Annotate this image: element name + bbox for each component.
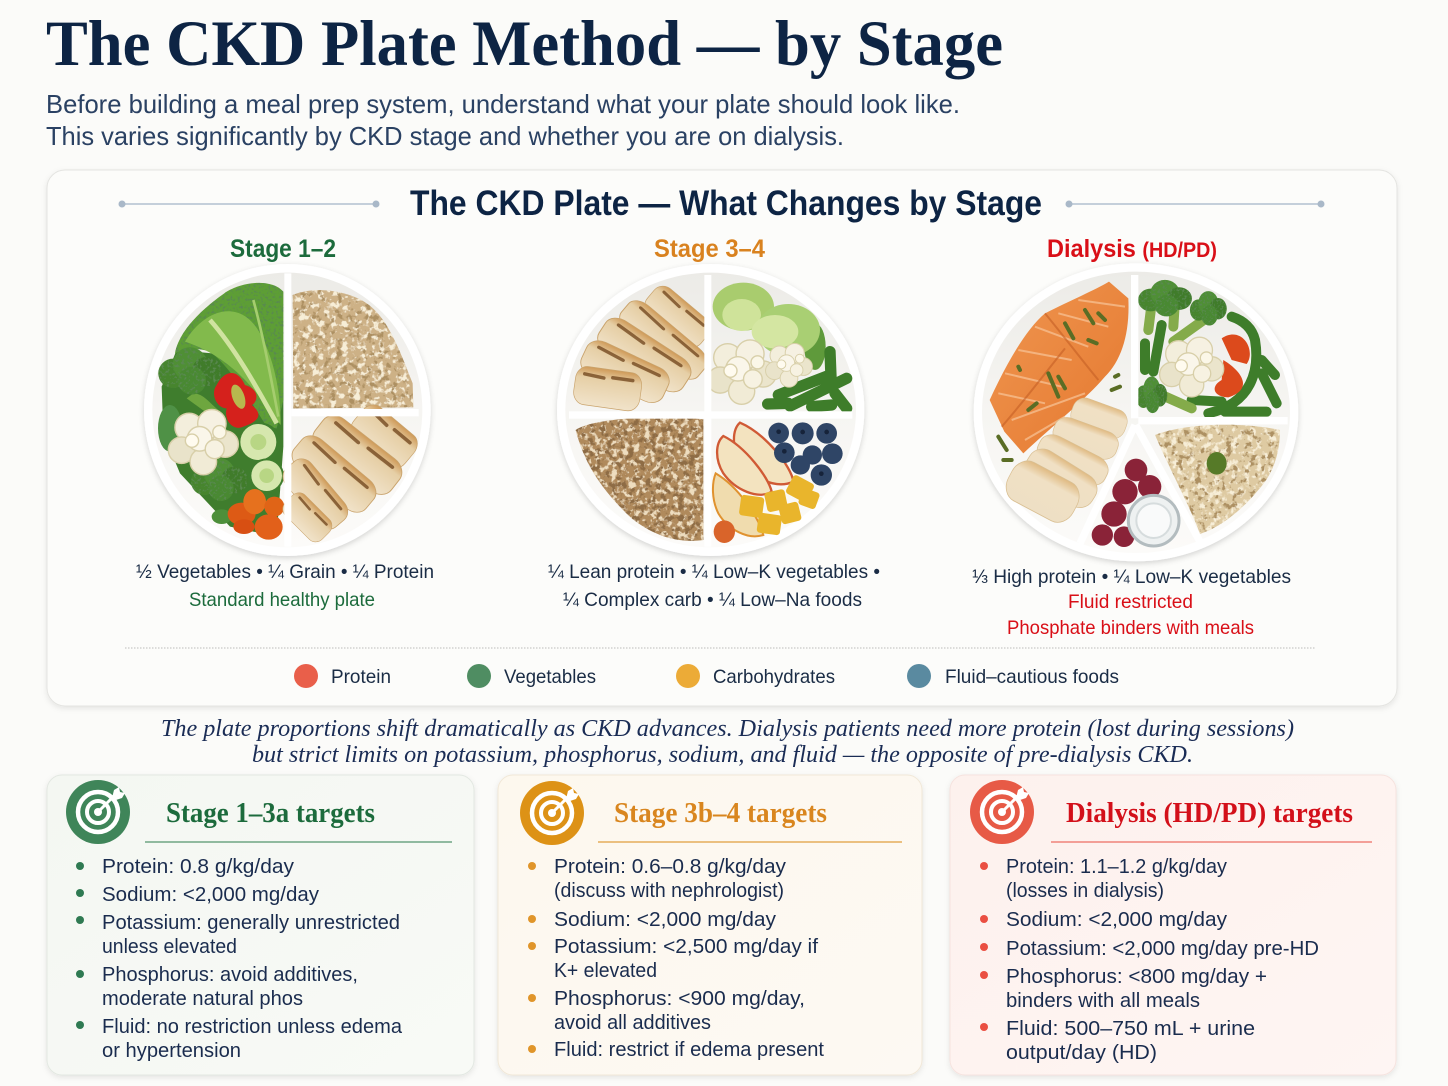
legend: protein: [294, 664, 391, 688]
caption: dialysis: Phosphate binders with meals: [1007, 617, 1254, 639]
target list: output/day (HD): [1006, 1041, 1157, 1064]
caption: dialysis: Fluid restricted: [1068, 591, 1193, 613]
panel heading: The CKD Plate — What Changes by Stage: [410, 184, 1042, 223]
target list: Protein: 0.8 g/kg/day: [102, 855, 295, 878]
grapes and glass: [1092, 459, 1179, 547]
blueberries: [768, 422, 843, 486]
target list: [980, 855, 1319, 1064]
caption: stage 3-4: ¼ Lean protein • ¼ Low–K vegetables •: [548, 561, 880, 583]
heading: Stage 3b–4 targets: [614, 797, 827, 829]
icon: target red: [970, 780, 1034, 844]
target list: Fluid: 500–750 mL + urine: [1006, 1017, 1255, 1040]
caption: stage 1-2: ½ Vegetables • ¼ Grain • ¼ Protein: [136, 561, 434, 583]
target list: Protein: 0.6–0.8 g/kg/day: [554, 855, 787, 878]
target list: Potassium: <2,000 mg/day pre-HD: [1006, 937, 1319, 960]
target list: Fluid: restrict if edema present: [554, 1038, 824, 1061]
subtitle: This varies significantly by CKD stage and whether you are on dialysis.: [46, 121, 844, 151]
vegetables: [1136, 280, 1277, 413]
target list: Fluid: no restriction unless edema: [102, 1015, 403, 1038]
subtitle: [46, 89, 960, 151]
legend: vegetables: Vegetables: [504, 666, 596, 688]
legend: carbohydrates: Carbohydrates: [713, 666, 835, 688]
apples: [713, 423, 793, 543]
target list: Phosphorus: avoid additives,: [102, 963, 358, 986]
target list: Sodium: <2,000 mg/day: [554, 908, 777, 931]
grain: [576, 417, 703, 541]
panel: dialysis targets: [950, 775, 1396, 1075]
italic note: [161, 716, 1294, 768]
target list: Potassium: generally unrestricted: [102, 911, 400, 934]
caption: stage 1-2: Standard healthy plate: [189, 589, 375, 611]
italic note: but strict limits on potassium, phosphorus, sodium, and fluid — the opposite of pre-dialysis CKD.: [252, 742, 1193, 768]
protein: [572, 281, 715, 412]
vegetables: [158, 283, 284, 540]
target list: (losses in dialysis): [1006, 879, 1164, 902]
target list: Sodium: <2,000 mg/day: [1006, 908, 1228, 931]
target list: (discuss with nephrologist): [554, 879, 784, 902]
subtitle: Before building a meal prep system, understand what your plate should look like.: [46, 89, 960, 119]
caption: stage 1-2: [136, 561, 434, 611]
dividers: [704, 275, 711, 547]
heading: Dialysis (HD/PD) targets: [1066, 797, 1353, 829]
target list: Protein: 1.1–1.2 g/kg/day: [1006, 855, 1228, 878]
dividers: [1131, 275, 1138, 418]
legend: carbohydrates: [676, 664, 835, 688]
mango: [739, 474, 820, 536]
icon: target orange: [520, 781, 584, 845]
vegetables: [707, 283, 847, 408]
target list: Phosphorus: <900 mg/day,: [554, 987, 805, 1010]
target list: moderate natural phos: [102, 987, 303, 1010]
panel: stage 3b-4 targets: [498, 775, 922, 1075]
target list: [76, 855, 403, 1062]
salmon: [990, 282, 1129, 460]
protein slices: [1000, 395, 1131, 528]
dialysis label: Dialysis (HD/PD): [1047, 235, 1217, 263]
stage 3-4 label: Stage 3–4: [654, 235, 765, 263]
stage 1-2 label: Stage 1–2: [230, 235, 336, 263]
target list: Potassium: <2,500 mg/day if: [554, 935, 818, 958]
grain: [293, 290, 413, 408]
target list: K+ elevated: [554, 959, 657, 982]
legend: protein: Protein: [331, 666, 391, 688]
target list: avoid all additives: [554, 1011, 711, 1034]
plate: dialysis: [974, 263, 1298, 561]
rice: [1155, 425, 1280, 534]
heading: Stage 1–3a targets: [166, 797, 375, 829]
icon: target green: [66, 780, 130, 844]
target list: Sodium: <2,000 mg/day: [102, 883, 320, 906]
legend: vegetables: [467, 664, 596, 688]
protein: [278, 400, 422, 546]
italic note: The plate proportions shift dramatically as CKD advances. Dialysis patients need more protein (lost during sessions): [161, 716, 1294, 742]
caption: stage 3-4: [548, 561, 880, 611]
target list: binders with all meals: [1006, 989, 1200, 1012]
plate: stage 1-2: [144, 264, 431, 556]
target list: [528, 855, 824, 1061]
caption: stage 3-4: ¼ Complex carb • ¼ Low–Na foods: [563, 589, 862, 611]
target list: or hypertension: [102, 1039, 241, 1062]
target list: unless elevated: [102, 935, 237, 958]
caption: dialysis: ⅓ High protein • ¼ Low–K vegetables: [972, 566, 1291, 588]
plate: stage 3-4: [557, 264, 864, 556]
title: The CKD Plate Method — by Stage: [46, 8, 1003, 80]
legend: [294, 664, 1119, 688]
legend: fluid-cautious foods: Fluid–cautious foods: [945, 666, 1119, 688]
caption: dialysis: [972, 566, 1291, 639]
dividers: [284, 273, 291, 547]
panel: stage 1-3a targets: [47, 775, 474, 1075]
target list: Phosphorus: <800 mg/day +: [1006, 965, 1267, 988]
panel: the CKD plate by stage: [47, 170, 1397, 706]
